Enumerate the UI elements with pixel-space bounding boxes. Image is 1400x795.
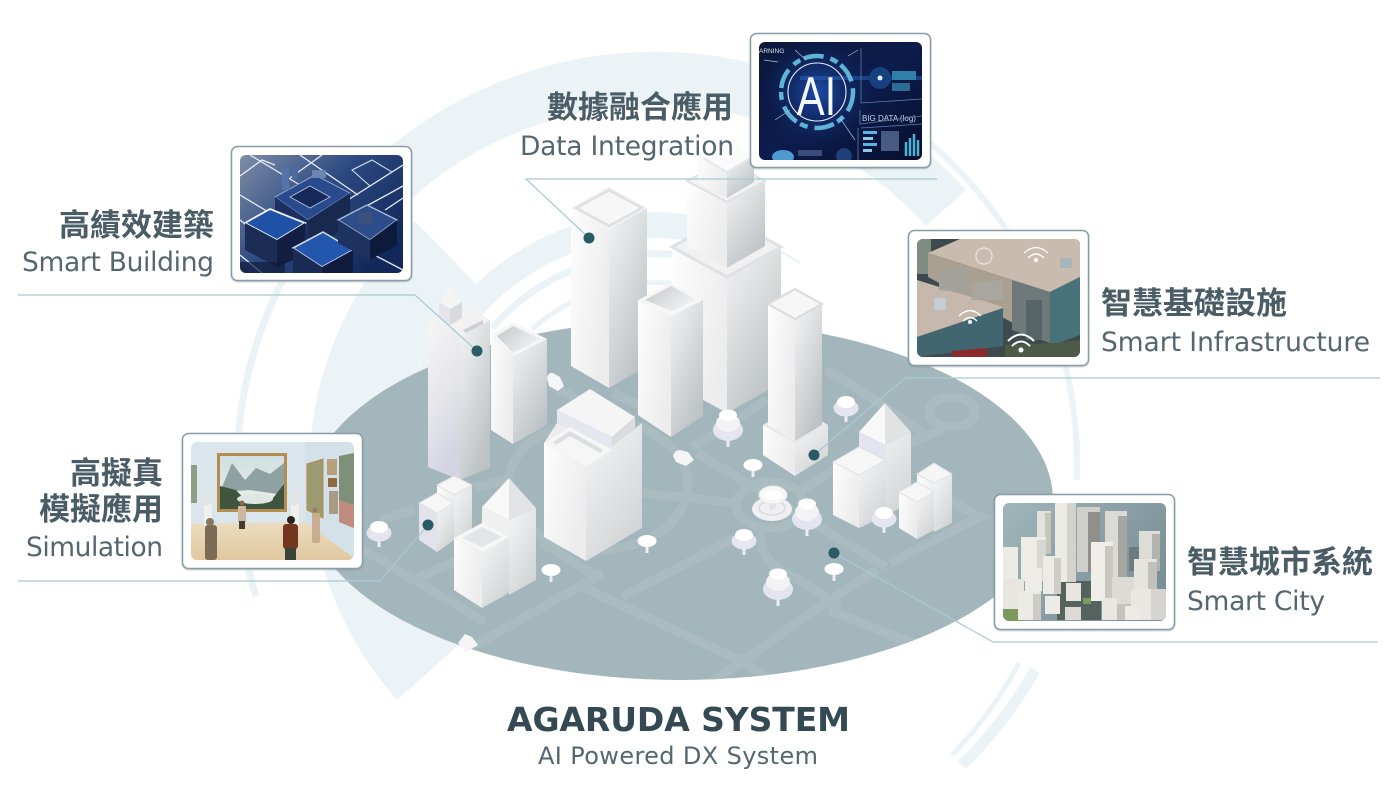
building: tall tower back <box>571 186 647 388</box>
ring: right thin arc <box>930 143 1077 480</box>
building: wide centre-front tower <box>544 389 642 561</box>
building: slim tower with base <box>763 289 828 476</box>
ring: innermost thin arc <box>532 283 703 329</box>
card: Smart Building image <box>232 146 412 280</box>
text: Smart Infrastructure <box>1101 286 1370 358</box>
text: Smart Infrastructure: Smart Infrastructure <box>1101 327 1370 358</box>
text: Data Integration: 數據融合應用 <box>547 90 733 125</box>
callout leader lines <box>18 179 1380 642</box>
text: Simulation: 模擬應用 <box>39 492 163 527</box>
text: Smart Building: 高績效建築 <box>59 208 214 243</box>
ring: inner band tail <box>782 252 800 263</box>
cars <box>458 373 694 652</box>
card: Data Integration AI image: AI <box>797 67 836 127</box>
text: Smart Building: Smart Building <box>22 247 214 278</box>
text: Smart Infrastructure: 智慧基礎設施 <box>1101 286 1287 321</box>
building: small twin blocks left <box>419 476 472 552</box>
text: Smart Building <box>22 208 214 278</box>
building: pyramid roof block left <box>454 478 536 608</box>
text: Simulation: Simulation <box>26 532 163 563</box>
ring: lower right thin arc <box>952 663 1019 755</box>
text: Data Integration: Data Integration <box>520 131 734 162</box>
title: AGARUDA SYSTEM: AGARUDA SYSTEM <box>507 700 850 739</box>
text: Smart City <box>1187 545 1373 617</box>
ring: top thick band <box>313 52 966 261</box>
card: Data Integration AI image <box>750 32 930 168</box>
ring: lower right thick arc <box>962 670 1035 765</box>
ring: inner thin arc <box>492 254 693 328</box>
ring: left thin arc <box>237 230 313 596</box>
isometric buildings <box>366 138 952 652</box>
road network <box>330 370 980 690</box>
building: pyramid roof block right <box>833 403 911 528</box>
text: Simulation: 高擬真 <box>70 456 163 491</box>
building: small twin blocks right <box>899 463 952 539</box>
card: Smart Infrastructure image <box>908 230 1088 366</box>
text: Smart City: 智慧城市系統 <box>1187 545 1373 580</box>
subtitle: AI Powered DX System <box>538 742 818 770</box>
building: stepped central tower <box>672 138 781 413</box>
background: pale concentric rings <box>237 52 1077 765</box>
card: Smart City image <box>994 494 1174 630</box>
callout anchor dots <box>422 232 840 558</box>
text: Smart City: Smart City <box>1187 586 1325 617</box>
fountain <box>752 486 792 521</box>
ring: lower-left sector <box>309 221 476 700</box>
trees <box>366 396 896 606</box>
card: Data Integration AI image: ARNING <box>759 48 784 55</box>
building: short block <box>491 322 547 444</box>
ring: inner band <box>414 225 758 427</box>
building: front centre block <box>638 283 703 437</box>
building: left tower with lavender face <box>428 287 490 480</box>
card: Data Integration AI image: BIG DATA (log) <box>862 114 916 123</box>
text: Data Integration <box>520 90 734 162</box>
city ground ellipse <box>307 320 1053 680</box>
text: Simulation <box>26 456 163 563</box>
card: Simulation gallery image <box>182 434 362 568</box>
